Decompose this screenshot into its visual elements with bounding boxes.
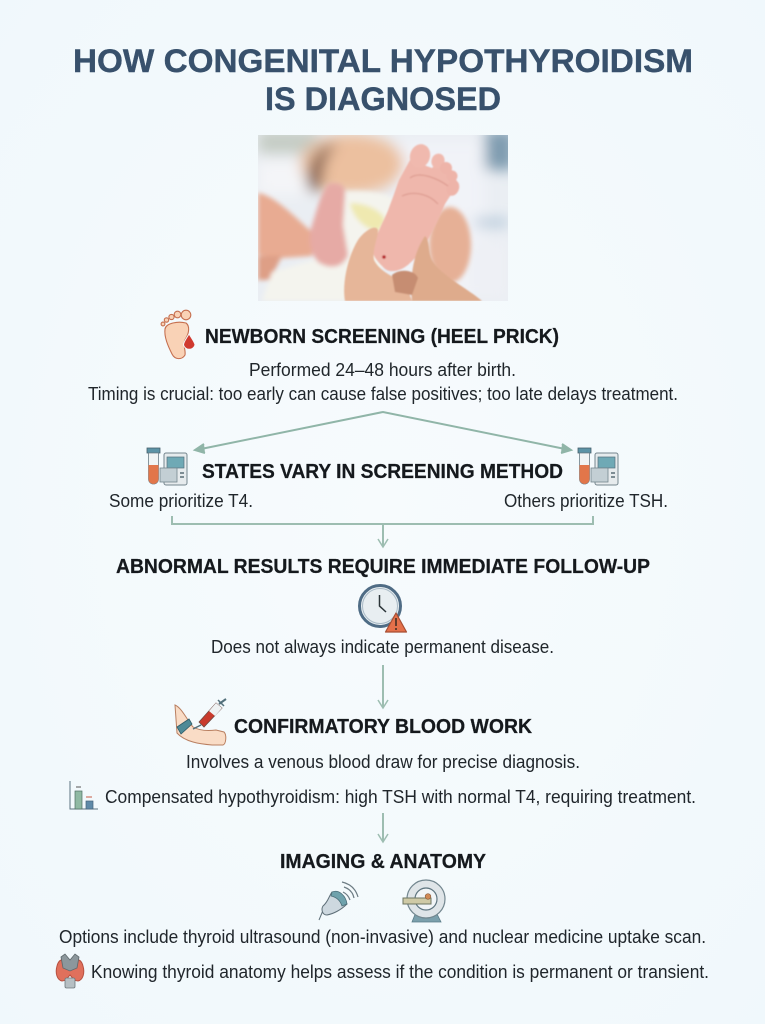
text: screening timing: Performed 24–48 hours after birth. bbox=[249, 359, 516, 380]
text: imaging options: Options include thyroid ultrasound (non-invasive) and nuclear medicine uptake scan. bbox=[59, 926, 706, 947]
text: others prioritize TSH: Others prioritize TSH. bbox=[504, 490, 668, 511]
heading: abnormal results: ABNORMAL RESULTS REQUIRE IMMEDIATE FOLLOW-UP bbox=[116, 556, 650, 578]
arrow: to confirmatory blood work bbox=[378, 665, 388, 708]
icon: left lab analyzer bbox=[147, 448, 187, 485]
icon: thyroid gland bbox=[56, 954, 84, 988]
icon: clock with warning bbox=[360, 586, 406, 632]
icon: nuclear medicine scanner bbox=[403, 880, 445, 922]
text: venous blood draw: Involves a venous blood draw for precise diagnosis. bbox=[186, 751, 580, 772]
heading: confirmatory blood work: CONFIRMATORY BLOOD WORK bbox=[234, 716, 533, 738]
arrow: bracket merging to abnormal results bbox=[172, 516, 593, 547]
heading: newborn screening: NEWBORN SCREENING (HEEL PRICK) bbox=[205, 326, 559, 348]
icon: foot with blood drop bbox=[161, 310, 195, 359]
title: HOW CONGENITAL HYPOTHYROIDISM bbox=[73, 43, 693, 79]
text: screening timing: Timing is crucial: too early can cause false positives; too late delays treatment. bbox=[88, 383, 678, 404]
photo: newborn heel prick bbox=[258, 130, 515, 301]
text: some prioritize T4: Some prioritize T4. bbox=[109, 490, 253, 511]
icon: ultrasound probe bbox=[319, 882, 358, 920]
text: compensated hypothyroidism: Compensated hypothyroidism: high TSH with normal T4, requiring treatment. bbox=[105, 786, 696, 807]
icon: arm blood draw bbox=[175, 699, 226, 745]
arrow: split to two screening methods bbox=[195, 412, 571, 453]
arrow: to imaging and anatomy bbox=[378, 813, 388, 842]
title: IS DIAGNOSED bbox=[265, 81, 501, 117]
foot details bbox=[373, 160, 459, 271]
text: thyroid anatomy: Knowing thyroid anatomy helps assess if the condition is permanent or transient. bbox=[91, 961, 709, 982]
text: does not always indicate: Does not always indicate permanent disease. bbox=[211, 636, 554, 657]
text: screening timing bbox=[88, 359, 678, 404]
icon: right lab analyzer bbox=[578, 448, 618, 485]
heading: states vary: STATES VARY IN SCREENING METHOD bbox=[202, 461, 563, 483]
heading: imaging and anatomy: IMAGING & ANATOMY bbox=[280, 851, 487, 873]
icon: TSH T4 bar chart bbox=[70, 781, 98, 809]
title bbox=[73, 43, 693, 117]
